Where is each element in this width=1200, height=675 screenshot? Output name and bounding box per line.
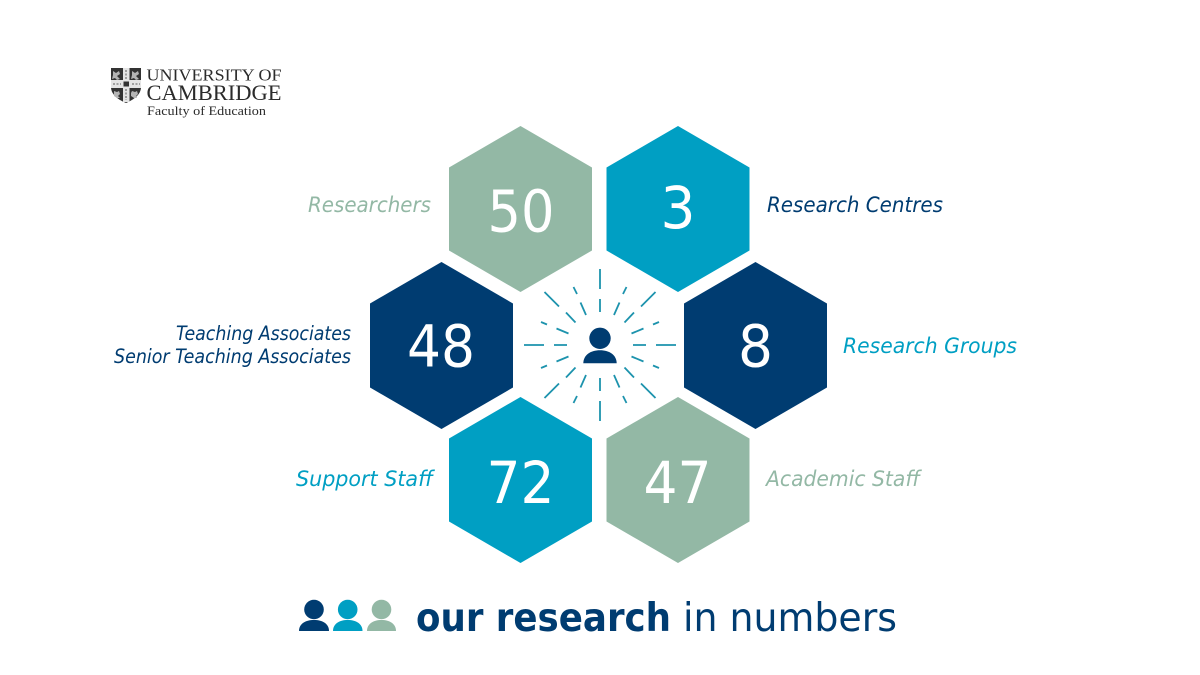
label: Academic Staff: Academic Staff	[764, 467, 922, 492]
icon: three people	[299, 600, 396, 631]
label: Research Centres: Research Centres	[767, 193, 943, 218]
label: Teaching Associates and Senior Teaching Associates	[114, 322, 351, 368]
hexagon: Research Centres 3: 3	[660, 175, 696, 242]
hexagon: Academic Staff 47	[606, 397, 750, 563]
label line: Teaching Associates: Teaching Associates	[176, 322, 351, 345]
hexagon: Researchers 50: 50	[488, 178, 554, 246]
hexagon: Support Staff 72	[449, 397, 592, 563]
title bold part: our research	[416, 596, 671, 641]
hexagon: Teaching Associates 48	[370, 262, 513, 429]
hexagon: Researchers 50	[449, 126, 592, 292]
icon: university shield	[111, 68, 141, 103]
logo text: Faculty of Education: Faculty of Education	[147, 104, 267, 118]
logo text: University of: UNIVERSITY OF	[146, 66, 282, 84]
label line: Senior Teaching Associates: Senior Teaching Associates	[114, 345, 351, 368]
label: Research Groups: Research Groups	[843, 334, 1017, 359]
icon: central person with radiating lines	[524, 269, 676, 421]
label: Support Staff: Support Staff	[296, 467, 435, 492]
title regular part: in numbers	[683, 596, 897, 641]
hexagon: Teaching Associates 48: 48	[407, 314, 475, 380]
hexagon: Support Staff 72: 72	[486, 450, 554, 517]
hexagon: Research Centres 3	[606, 126, 750, 292]
logo text: Cambridge: CAMBRIDGE	[146, 80, 282, 105]
hexagon: Research Groups 8	[684, 262, 827, 429]
title: our research in numbers	[416, 596, 897, 641]
hexagon: Research Groups 8: 8	[738, 314, 773, 380]
label: Researchers: Researchers	[308, 193, 431, 218]
hexagon: Academic Staff 47: 47	[644, 450, 712, 517]
logo: University of Cambridge Faculty of Education	[111, 66, 282, 118]
